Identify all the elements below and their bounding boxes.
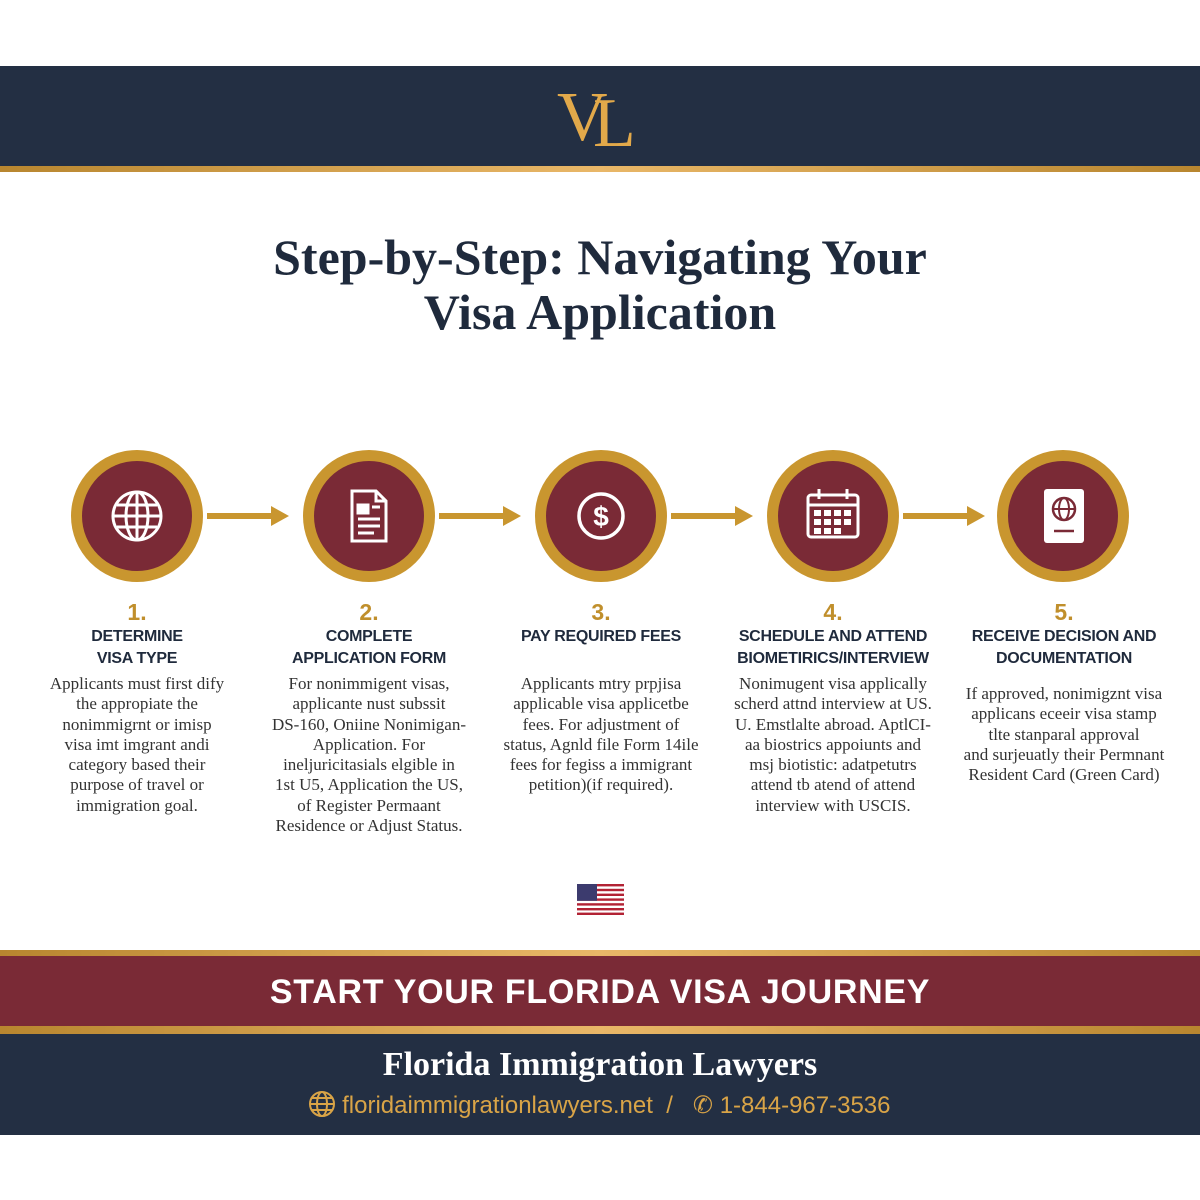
step 5 text: and surjeuatly their Permnant: [964, 745, 1164, 764]
CTA banner: [0, 950, 1200, 1034]
CTA banner: START YOUR FLORIDA VISA JOURNEY: [270, 973, 930, 1011]
step 4 text: U. Emstlalte abroad. AptlCI-: [735, 715, 931, 734]
step 4 text: attend tb atend of attend: [751, 775, 915, 794]
step 5 text: Resident Card (Green Card): [968, 765, 1160, 784]
step 5 text: If approved, nonimigznt visa: [966, 684, 1162, 703]
step 2 text: Residence or Adjust Status.: [276, 816, 462, 835]
step 5 text: 5.: [1054, 599, 1074, 625]
icon: US flag: [577, 884, 624, 915]
step 5 text: RECEIVE DECISION AND: [972, 628, 1156, 645]
title: Visa Application: [424, 284, 776, 340]
step 1 text: immigration goal.: [76, 796, 198, 815]
step 4 text: aa biostrics appoiunts and: [745, 735, 921, 754]
step 3 text: applicable visa applicetbe: [513, 694, 689, 713]
title: Step-by-Step: Navigating Your: [273, 229, 927, 285]
step 2 text: Application. For: [313, 735, 425, 754]
step 2 text: APPLICATION FORM: [292, 650, 446, 667]
footer: [0, 1034, 1200, 1135]
step 2 icon: [303, 450, 435, 582]
step 1 text: nonimmigrnt or imisp: [62, 715, 212, 734]
step 3 text: fees for fegiss a immigrant: [510, 755, 692, 774]
footer: Florida Immigration Lawyers: [383, 1046, 817, 1083]
step 5 text: tlte stanparal approval: [988, 725, 1140, 744]
logo: L: [593, 85, 636, 162]
step 4 icon: [767, 450, 899, 582]
step 1 text: the appropiate the: [76, 694, 198, 713]
step 2 text: of Register Permaant: [297, 796, 441, 815]
step 5 text: DOCUMENTATION: [996, 650, 1132, 667]
step 1 text: VISA TYPE: [97, 650, 177, 667]
step 5 text: applicans eceeir visa stamp: [971, 704, 1157, 723]
step 3 text: petition)(if required).: [529, 775, 673, 794]
logo: V: [557, 79, 608, 156]
step 1 text: purpose of travel or: [70, 775, 204, 794]
step 4 text: interview with USCIS.: [755, 796, 911, 815]
step 1 icon: [71, 450, 203, 582]
step 4 text: Nonimugent visa applically: [739, 674, 927, 693]
step 5 icon: [997, 450, 1129, 582]
step 4 text: SCHEDULE AND ATTEND: [739, 628, 927, 645]
step 3 text: 3.: [591, 599, 611, 625]
step 2 text: DS-160, Oniine Nonimigan-: [272, 715, 466, 734]
step 3 text: [503, 599, 699, 794]
title: [273, 229, 927, 340]
step 4 text: msj biotistic: adatpetutrs: [749, 755, 917, 774]
logo: [557, 79, 636, 162]
step 3 icon: [535, 450, 667, 582]
step 1 text: 1.: [127, 599, 147, 625]
step 2 text: 1st U5, Application the US,: [275, 775, 463, 794]
step 2 text: 2.: [359, 599, 379, 625]
step 1 text: DETERMINE: [91, 628, 183, 645]
step 4 text: 4.: [823, 599, 843, 625]
step 1 text: Applicants must first dify: [50, 674, 224, 693]
step 2 text: For nonimmigent visas,: [288, 674, 450, 693]
step 4 text: [734, 599, 932, 815]
step 5 text: [964, 599, 1164, 784]
step 3 text: Applicants mtry prpjisa: [521, 674, 681, 693]
arrow 1: [207, 506, 289, 526]
step 1 text: [50, 599, 224, 815]
step 3 text: fees. For adjustment of: [523, 715, 679, 734]
contact line: floridaimmigrationlawyers.net / ✆ 1-844-967-3536: [342, 1092, 891, 1119]
step 1 text: category based their: [69, 755, 205, 774]
header band: [0, 66, 1200, 166]
step 4 text: BIOMETIRICS/INTERVIEW: [737, 650, 929, 667]
step 3 text: PAY REQUIRED FEES: [521, 628, 681, 645]
step 4 text: scherd attnd interview at US.: [734, 694, 932, 713]
step 2 text: [272, 599, 466, 835]
arrow 2: [439, 506, 521, 526]
step 2 text: COMPLETE: [326, 628, 412, 645]
step 2 text: applicante nust subssit: [292, 694, 445, 713]
step 3 icon: $: [593, 501, 609, 532]
step 1 text: visa imt imgrant andi: [65, 735, 209, 754]
step 2 text: ineljuricitasials elgible in: [283, 755, 455, 774]
arrow 4: [903, 506, 985, 526]
arrow 3: [671, 506, 753, 526]
step 3 text: status, Agnld file Form 14ile: [503, 735, 699, 754]
